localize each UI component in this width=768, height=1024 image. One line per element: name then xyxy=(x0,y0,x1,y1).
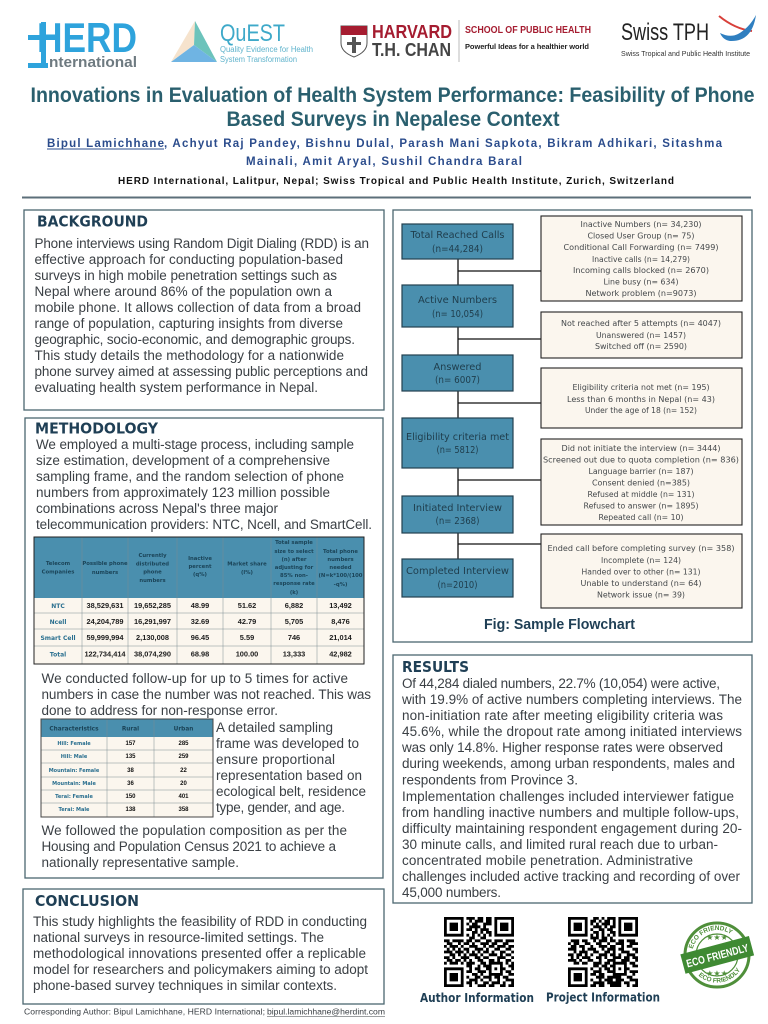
text block: conclusion xyxy=(33,914,368,993)
text block: methodology intro: size estimation, development of a comprehensive xyxy=(36,453,330,468)
flow box: initiated interview: Initiated Interview xyxy=(413,503,502,514)
table: telecom companies: 8,476 xyxy=(331,617,350,626)
text block: sampling frame: ecological belt, residence xyxy=(216,784,366,799)
table: telecom companies: Ncell xyxy=(50,619,66,626)
table: telecom companies: 21,014 xyxy=(329,633,353,642)
exclusion box: not reached: Unanswered (n= 1457) xyxy=(596,330,686,340)
badge: eco friendly: ★★★ xyxy=(706,933,728,942)
panel: sample flowchart xyxy=(393,210,752,642)
flow box: answered: (n= 6007) xyxy=(435,375,480,386)
table: telecom companies: needed xyxy=(329,565,352,571)
table: telecom companies: Companies xyxy=(42,570,74,576)
table: telecom companies: 59,999,994 xyxy=(86,633,124,642)
text block: methodology intro: We employed a multi-stage process, including sample xyxy=(36,437,354,452)
exclusion box: eligibility not met xyxy=(541,368,742,428)
table: telecom companies: Possible phone xyxy=(82,561,128,567)
title xyxy=(30,84,754,131)
caption: sample flowchart: Fig: Sample Flowchart xyxy=(484,616,635,633)
flow box: eligibility criteria met: (n= 5812) xyxy=(436,445,478,456)
table: telecom companies: 6,882 xyxy=(285,601,303,610)
text block: background: evaluating health system performance in Nepal. xyxy=(34,380,318,395)
text block: census xyxy=(42,823,347,870)
text block: background: effective approach for conducting population-based xyxy=(34,252,343,267)
panel: results xyxy=(393,655,752,903)
table: telecom companies: 48.99 xyxy=(191,601,209,610)
text block: background: surveys in high mobile penetration settings such as xyxy=(34,268,337,283)
table: telecom companies: Currently xyxy=(138,553,167,559)
text block: census: Housing and Population Census 2021 to achieve a xyxy=(42,839,336,854)
text block: results: non-initiation rate after meeting eligibility criteria was xyxy=(402,708,723,723)
authors xyxy=(47,138,723,168)
heading: methodology: METHODOLOGY xyxy=(35,420,159,438)
exclusion box: did not initiate: Refused to answer (n= 1895) xyxy=(584,500,698,510)
table: sampling frame: 259 xyxy=(178,754,189,760)
table: telecom companies: 38,529,631 xyxy=(86,601,124,610)
table: telecom companies: 746 xyxy=(288,633,300,642)
flow box: total reached calls xyxy=(402,224,513,259)
exclusion box: inactive numbers: Conditional Call Forwarding (n= 7499) xyxy=(564,242,718,252)
table: telecom companies: response rate xyxy=(273,581,315,587)
table: telecom companies: 32.69 xyxy=(191,617,209,626)
text block: results xyxy=(401,676,742,900)
table: sampling frame: 358 xyxy=(178,807,189,813)
text block: results: Implementation challenges included interviewer fatigue xyxy=(402,789,734,804)
table: telecom companies: -q%) xyxy=(334,582,347,588)
authors: Mainali, Amit Aryal, Sushil Chandra Baral xyxy=(246,156,522,168)
logo: Harvard T.H. Chan School of Public Health: T.H. CHAN xyxy=(372,40,451,60)
table: sampling frame xyxy=(41,719,213,817)
logo: HERD International: nternational xyxy=(49,54,137,71)
table: telecom companies: Market share xyxy=(227,562,267,568)
table: telecom companies: Total xyxy=(50,652,66,658)
table: telecom companies: 122,734,414 xyxy=(84,650,126,658)
text block: sampling frame: type, gender, and age. xyxy=(216,800,345,815)
text block: results: challenges included active tracking and recording of over xyxy=(402,869,740,884)
text block: follow-up: numbers in case the number was not reached. This was xyxy=(42,687,371,702)
exclusion box: eligibility not met: Less than 6 months in Nepal (n= 43) xyxy=(567,394,715,404)
exclusion box: ended call xyxy=(541,534,742,608)
text block: results: Of 44,284 dialed numbers, 22.7% (10,054) were active, xyxy=(402,676,720,691)
table: sampling frame: 135 xyxy=(125,754,136,760)
exclusion box: ended call: Handed over to other (n= 131) xyxy=(582,566,700,576)
text block: results: 45,000 numbers. xyxy=(402,885,501,900)
text block: background: Nepal where around 86% of the population own a xyxy=(34,284,332,299)
label: author information: Author Information xyxy=(420,991,534,1005)
exclusion box: inactive numbers xyxy=(541,216,742,301)
table: telecom companies: 68.98 xyxy=(191,650,209,658)
logo: Swiss TPH: Swiss TPH xyxy=(621,19,709,46)
table: sampling frame: 285 xyxy=(178,741,189,747)
logo: Harvard T.H. Chan School of Public Health: SCHOOL OF PUBLIC HEALTH xyxy=(465,25,591,36)
table: telecom companies: 42,982 xyxy=(329,650,352,658)
exclusion box: inactive numbers: Inactive calls (n= 14,279) xyxy=(592,254,690,264)
text block: follow-up xyxy=(42,671,371,718)
exclusion box: did not initiate: Refused at middle (n= 131) xyxy=(588,489,694,499)
exclusion box: inactive numbers: Network problem (n=9073) xyxy=(586,288,696,298)
table: sampling frame: Mountain: Male xyxy=(52,781,96,787)
text block: sampling frame: A detailed sampling xyxy=(216,720,333,735)
text block: results: during weekends, among urban respondents, males and xyxy=(402,756,735,771)
badge: eco friendly: ★★★ xyxy=(706,969,728,978)
table: telecom companies: 5.59 xyxy=(240,633,254,642)
text block: follow-up: We conducted follow-up for up to 5 times for active xyxy=(42,671,348,686)
flow box: eligibility criteria met: Eligibility criteria met xyxy=(406,432,509,443)
table: sampling frame: Characteristics xyxy=(49,726,99,732)
table: telecom companies: numbers xyxy=(92,570,118,576)
badge: eco friendly: ECO FRIENDLY xyxy=(685,942,751,970)
exclusion box: did not initiate: Did not initiate the interview (n= 3444) xyxy=(562,443,720,453)
logo: HERD International: HERD xyxy=(37,14,137,61)
exclusion box: ended call: Incomplete (n= 124) xyxy=(601,555,681,565)
text block: conclusion: methodological innovations presented offer a replicable xyxy=(33,946,366,961)
table: telecom companies: (q%) xyxy=(193,572,207,578)
exclusion box: not reached: Switched off (n= 2590) xyxy=(595,341,687,351)
table: sampling frame: Mountain: Female xyxy=(49,768,100,774)
table: telecom companies: NTC xyxy=(51,603,65,610)
table: telecom companies: Total phone xyxy=(323,549,358,555)
exclusion box: ended call: Ended call before completing survey (n= 358) xyxy=(548,543,734,553)
table: telecom companies xyxy=(34,537,364,664)
text block: results: concentrated mobile penetration. Administrative xyxy=(402,853,693,868)
exclusion box: inactive numbers: Inactive Numbers (n= 34,230) xyxy=(580,219,702,229)
QR code: project information xyxy=(568,917,638,987)
text block: conclusion: phone-based survey techniques in similar contexts. xyxy=(33,978,337,993)
exclusion box: ended call: Unable to understand (n= 64) xyxy=(580,578,702,588)
authors: Bipul Lamichhane xyxy=(47,138,164,150)
flow box: completed interview: Completed Interview xyxy=(406,566,509,577)
table: sampling frame: 36 xyxy=(127,781,134,787)
text block: conclusion: national surveys in resource-limited settings. The xyxy=(33,930,324,945)
exclusion box: eligibility not met: Under the age of 18 (n= 152) xyxy=(585,405,697,415)
logo: QuEST: System Transformation xyxy=(220,55,297,64)
logo: Swiss TPH: Swiss Tropical and Public Health Institute xyxy=(621,49,750,58)
table: telecom companies: Inactive xyxy=(188,556,212,562)
text block: methodology intro: numbers from approximately 123 million possible xyxy=(36,485,330,500)
exclusion box: did not initiate: Screened out due to quota completion (n= 836) xyxy=(543,454,739,464)
text block: results: 30 minute calls, and limited rural reach due to urban- xyxy=(402,837,718,852)
text block: results: from handling inactive numbers and multiple follow-ups, xyxy=(402,805,739,820)
exclusion box: inactive numbers: Line busy (n= 634) xyxy=(604,276,678,286)
table: telecom companies: 100.00 xyxy=(236,650,258,658)
logo: QuEST: Quality Evidence for Health xyxy=(220,45,313,54)
flow box: total reached calls: Total Reached Calls xyxy=(409,230,504,241)
text block: sampling frame xyxy=(216,720,366,815)
badge: eco friendly: ECO FRIENDLY xyxy=(698,967,740,983)
flow box: initiated interview: (n= 2368) xyxy=(436,516,480,527)
logo: Harvard T.H. Chan School of Public Health xyxy=(341,20,591,62)
panel: conclusion xyxy=(23,889,384,1004)
exclusion box: did not initiate xyxy=(541,439,742,525)
logo: QuEST: QuEST xyxy=(220,20,285,47)
text block: results: difficulty maintaining respondent engagement during 20- xyxy=(402,821,742,836)
table: sampling frame: Rural xyxy=(122,726,139,732)
table: telecom companies: 5,705 xyxy=(285,617,303,626)
text block: background xyxy=(34,236,369,395)
table: telecom companies: 24,204,789 xyxy=(86,617,124,626)
table: telecom companies: (n) after xyxy=(281,557,307,563)
text block: sampling frame: representation based on xyxy=(216,768,362,783)
table: sampling frame: Hill: Female xyxy=(57,741,91,747)
table: sampling frame: Terai: Female xyxy=(55,794,93,800)
text block: methodology intro: combinations across Nepal's three major xyxy=(36,501,278,516)
corresponding author xyxy=(24,1006,385,1016)
table: telecom companies: 13,492 xyxy=(329,601,352,610)
table: sampling frame: 20 xyxy=(180,781,187,787)
text block: background: mobile phone. It allows collection of data from a broad xyxy=(34,300,361,315)
text block: methodology intro xyxy=(36,437,372,532)
heading: background: BACKGROUND xyxy=(37,212,148,230)
exclusion box: eligibility not met: Eligibility criteria not met (n= 195) xyxy=(572,382,710,392)
heading: results: RESULTS xyxy=(402,658,469,676)
corresponding author: bipul.lamichhane@herdint.com xyxy=(267,1006,385,1016)
text block: background: range of population, capturing insights from diverse xyxy=(34,316,343,331)
table: telecom companies: 13,333 xyxy=(283,650,305,658)
table: telecom companies: 2,130,008 xyxy=(136,633,169,642)
text block: results: with 19.9% of active numbers completing interviews. The xyxy=(401,692,742,707)
label: project information: Project Information xyxy=(546,990,660,1004)
affiliations: HERD International, Lalitpur, Nepal; Swiss Tropical and Public Health Institute, Zurich, Switzerland xyxy=(118,176,674,187)
text block: results: 45.6%, while the dropout rate among initiated interviews xyxy=(402,724,742,739)
logo: Harvard T.H. Chan School of Public Health: Powerful Ideas for a healthier world xyxy=(465,42,589,51)
text block: census: nationally representative sample. xyxy=(42,855,239,870)
flow box: total reached calls: (n=44,284) xyxy=(432,244,483,255)
table: telecom companies: 85% non- xyxy=(280,573,308,579)
logo: Harvard T.H. Chan School of Public Health: HARVARD xyxy=(372,22,452,42)
table: sampling frame: 38 xyxy=(127,768,134,774)
exclusion box: did not initiate: Consent denied (n=385) xyxy=(592,478,690,488)
table: sampling frame: 150 xyxy=(125,794,136,800)
table: telecom companies: (l%) xyxy=(241,570,253,576)
table: telecom companies: 42.79 xyxy=(238,617,256,626)
table: telecom companies: size to select xyxy=(274,549,314,555)
text block: results: was only 14.8%. Higher response rates were observed xyxy=(401,740,723,755)
flow box: active numbers xyxy=(402,285,513,327)
table: telecom companies: (k) xyxy=(290,590,298,596)
flow box: active numbers: Active Numbers xyxy=(418,295,497,306)
table: telecom companies: Telecom xyxy=(46,561,71,567)
logo: Swiss TPH xyxy=(621,15,756,58)
authors: , Achyut Raj Pandey, Bishnu Dulal, Parash Mani Sapkota, Bikram Adhikari, Sitashma xyxy=(164,138,723,150)
table: sampling frame: Terai: Male xyxy=(59,807,90,813)
exclusion box: inactive numbers: Closed User Group (n= 75) xyxy=(588,230,694,240)
table: telecom companies: 16,291,997 xyxy=(134,617,171,626)
table: telecom companies: adjusting for xyxy=(275,565,314,571)
exclusion box: did not initiate: Language barrier (n= 187) xyxy=(588,466,694,476)
flow box: completed interview xyxy=(402,559,513,597)
text block: census: We followed the population composition as per the xyxy=(42,823,347,838)
table: telecom companies: 96.45 xyxy=(191,633,209,642)
badge: eco friendly xyxy=(680,922,754,988)
table: telecom companies: (N=k*100/(100 xyxy=(318,573,363,579)
title: Based Surveys in Nepalese Context xyxy=(226,108,560,131)
table: telecom companies: distributed xyxy=(136,562,169,568)
text block: methodology intro: telecommunication providers: NTC, Ncell, and SmartCell. xyxy=(36,517,372,532)
exclusion box: not reached: Not reached after 5 attempts (n= 4047) xyxy=(561,318,721,328)
flow box: answered xyxy=(402,355,513,391)
text block: follow-up: done to address for non-response error. xyxy=(42,703,278,718)
text block: methodology intro: sampling frame, and the random selection of phone xyxy=(36,469,344,484)
logo: QuEST xyxy=(171,20,313,64)
heading: conclusion: CONCLUSION xyxy=(35,892,139,910)
flow box: initiated interview xyxy=(402,496,513,533)
panel: methodology xyxy=(25,418,383,878)
text block: conclusion: This study highlights the feasibility of RDD in conducting xyxy=(33,914,367,929)
text block: background: geographic, socio-economic, and demographic groups. xyxy=(34,332,355,347)
table: sampling frame: 401 xyxy=(178,794,189,800)
table: telecom companies: 51.62 xyxy=(238,601,256,610)
badge: eco friendly: ECO FRIENDLY xyxy=(688,926,733,949)
text block: sampling frame: frame was developed to xyxy=(216,736,359,751)
QR code: author information xyxy=(444,917,514,987)
exclusion box: inactive numbers: Incoming calls blocked (n= 2670) xyxy=(573,265,709,275)
table: sampling frame: Urban xyxy=(174,726,193,732)
table: telecom companies: Smart Cell xyxy=(40,635,76,642)
table: sampling frame: Hill: Male xyxy=(61,754,88,760)
table: sampling frame: 138 xyxy=(125,807,136,813)
text block: sampling frame: ensure proportional xyxy=(216,752,335,767)
exclusion box: ended call: Network issue (n= 39) xyxy=(597,590,685,600)
text block: conclusion: model for researchers and policymakers aiming to adopt xyxy=(33,962,368,977)
flow box: active numbers: (n= 10,054) xyxy=(432,309,483,320)
table: sampling frame: 22 xyxy=(180,768,187,774)
table: telecom companies: numbers xyxy=(139,578,166,584)
table: sampling frame: 157 xyxy=(125,741,136,747)
flow box: eligibility criteria met xyxy=(402,418,513,468)
table: telecom companies: phone xyxy=(143,570,162,576)
text block: results: respondents from Province 3. xyxy=(402,772,578,788)
table: telecom companies: 19,652,285 xyxy=(134,601,171,610)
text block: background: Phone interviews using Random Digit Dialing (RDD) is an xyxy=(34,236,369,251)
panel: background xyxy=(24,210,384,410)
text block: background: phone survey aimed at assessing public perceptions and xyxy=(34,364,368,379)
flow box: answered: Answered xyxy=(434,362,482,373)
exclusion box: did not initiate: Repeated call (n= 10) xyxy=(598,512,684,522)
text block: background: This study details the methodology for a nationwide xyxy=(34,348,344,363)
flow box: completed interview: (n=2010) xyxy=(438,580,478,591)
corresponding author: Corresponding Author: Bipul Lamichhane, HERD International; xyxy=(24,1006,265,1016)
logo: HERD International xyxy=(28,14,137,71)
table: telecom companies: Total sample xyxy=(275,540,313,546)
table: telecom companies: 38,074,290 xyxy=(134,650,171,658)
table: telecom companies: numbers xyxy=(327,557,354,563)
table: telecom companies: percent xyxy=(188,564,212,570)
exclusion box: not reached xyxy=(541,312,742,358)
